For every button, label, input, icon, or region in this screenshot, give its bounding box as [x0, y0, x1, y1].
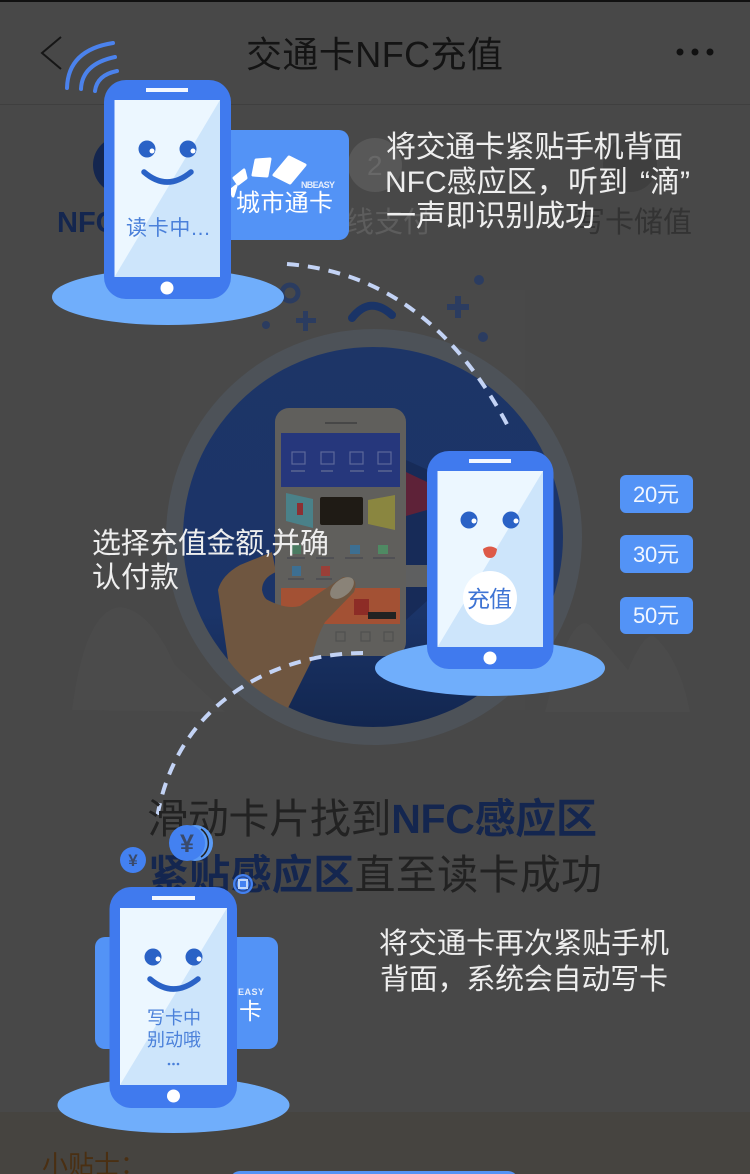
bottom button	[230, 1171, 518, 1174]
top up label: 充值	[467, 586, 512, 612]
icon: more menu	[676, 48, 714, 56]
icon: NFC waves	[67, 43, 117, 91]
amount 20: 20元	[633, 482, 679, 507]
card name: 城市通卡	[236, 190, 333, 217]
step 2 label: 线支付	[345, 206, 432, 239]
page title: 交通卡NFC充值	[246, 34, 503, 75]
card logo	[231, 157, 305, 196]
navigation bar	[42, 34, 714, 75]
app header	[281, 433, 400, 487]
instruction 2	[92, 527, 329, 594]
instruction 3: 将交通卡再次紧贴手机	[379, 927, 669, 960]
phone 3: writing	[110, 887, 237, 1108]
mouth	[483, 546, 497, 558]
inner navy disc	[183, 347, 563, 727]
outer ring	[166, 329, 582, 745]
dimmed body heading	[147, 796, 602, 898]
central circle illustration	[166, 329, 582, 745]
reading label: 读卡中...	[126, 217, 210, 240]
face	[138, 140, 196, 182]
coins	[120, 825, 253, 894]
face	[144, 948, 202, 989]
instruction 1: “滴”	[640, 166, 690, 199]
step 3 badge	[603, 138, 657, 192]
hand finger	[264, 577, 356, 660]
amount 50: 50元	[633, 603, 679, 628]
card brand text: NBEASY	[301, 180, 335, 190]
hand back	[218, 552, 312, 708]
card brand text: EASY	[238, 987, 264, 997]
instruction 1: 一声即识别成功	[386, 200, 595, 233]
bottom tabs	[336, 632, 393, 641]
instruction 1: NFC感应区，	[385, 166, 567, 199]
amount buttons	[620, 475, 693, 634]
phone 1: reading	[104, 80, 231, 299]
step 3 label: 写卡储值	[576, 206, 692, 239]
card behind phone 3	[95, 937, 278, 1049]
writing label: 写卡中	[147, 1008, 201, 1028]
coin small: ¥	[128, 851, 138, 870]
colored shapes behind phone	[406, 460, 428, 620]
phone 2: top up	[427, 451, 554, 669]
instruction 2: 认付款	[92, 561, 179, 594]
top up button	[463, 571, 517, 625]
background mountains	[72, 607, 690, 712]
amount 30: 30元	[633, 542, 679, 567]
app phone mockup	[275, 408, 406, 656]
dashed arrow 1	[287, 264, 510, 430]
amount 50	[620, 597, 693, 634]
platform ellipse 1	[52, 269, 284, 325]
step 1 label: NFC	[57, 207, 117, 239]
app icons	[291, 545, 388, 576]
step 2 number: 2	[367, 150, 383, 181]
eyes	[460, 512, 520, 528]
finger nail	[326, 573, 358, 603]
bank cards	[286, 493, 313, 528]
instruction 3: 背面，系统会自动写卡	[380, 963, 668, 996]
step headings dimmed behind overlay	[57, 136, 692, 239]
amount 30	[620, 535, 693, 573]
dashed arrow 2	[157, 653, 363, 818]
writing label	[147, 1008, 201, 1065]
instruction 1: 听到	[568, 166, 628, 199]
decorative plus and dots	[262, 275, 488, 342]
icon: back arrow	[42, 37, 61, 69]
amount 20	[620, 475, 693, 513]
promo banner	[281, 588, 400, 624]
step 2 badge	[348, 138, 402, 192]
dimmed body heading: 滑动卡片找到NFC感应区	[147, 796, 597, 842]
platform ellipse 2	[375, 640, 605, 696]
dimmed body heading: 紧贴感应区直至读卡成功	[148, 852, 602, 898]
instruction 3	[379, 927, 669, 996]
coin large: ¥	[180, 830, 194, 858]
writing label: 别动哦	[147, 1030, 201, 1050]
step 1 badge	[93, 136, 151, 194]
card character: 卡	[239, 998, 262, 1024]
platform ellipse 3	[58, 1077, 290, 1133]
instruction 2: 选择充值金额,并确	[92, 527, 329, 560]
card: city transit card	[200, 130, 349, 240]
instruction 1: 将交通卡紧贴手机背面	[386, 131, 683, 164]
coin square hole	[233, 874, 253, 894]
instruction 1	[385, 131, 690, 233]
